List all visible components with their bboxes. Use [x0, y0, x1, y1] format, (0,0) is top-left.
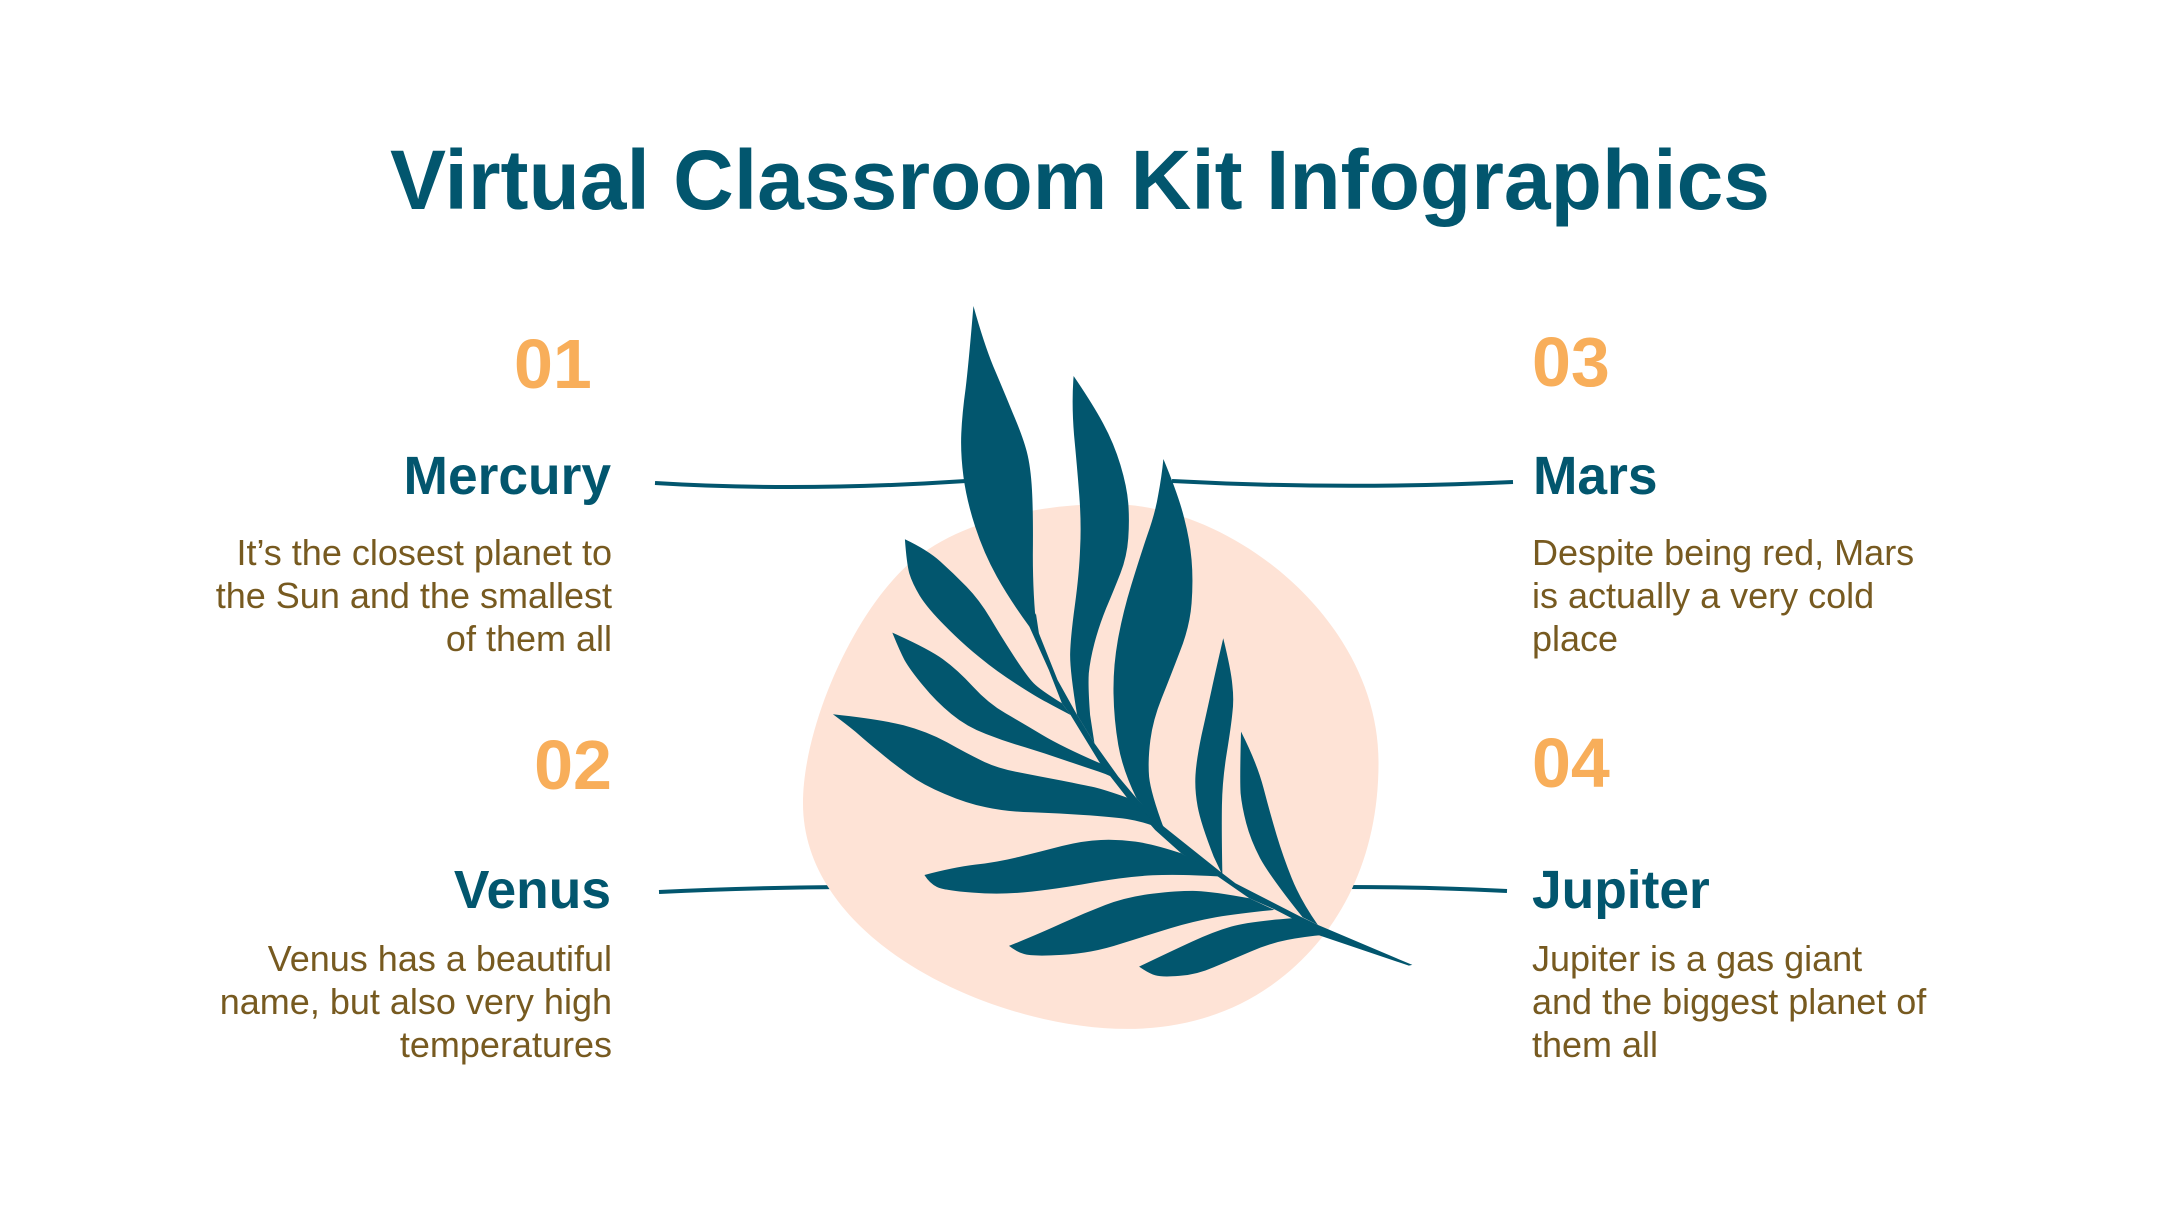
- number 03: 03: [1532, 323, 1610, 401]
- description Jupiter: them all: [1532, 1024, 1658, 1065]
- panel: 03 Mars: [1532, 323, 1914, 659]
- description Mars: place: [1532, 618, 1618, 659]
- central illustration: leaf on peach blob: [803, 306, 1412, 1029]
- leaf: left upper: [905, 539, 1071, 715]
- leaf: bottom second: [1009, 891, 1274, 956]
- main stem: [1029, 613, 1412, 966]
- panel: 04 Jupiter: [1532, 724, 1927, 1065]
- connector line: Mercury: [655, 481, 966, 487]
- connector line: Mars: [1172, 481, 1513, 486]
- description Mercury: It’s the closest planet to: [236, 532, 612, 573]
- panel: 02 Venus: [220, 726, 612, 1065]
- description Venus: Venus has a beautiful: [268, 938, 612, 979]
- leaf: bottom first: [924, 840, 1222, 894]
- leaf branch: [833, 306, 1412, 976]
- heading Jupiter: Jupiter: [1532, 861, 1710, 920]
- description Mars: Despite being red, Mars: [1532, 532, 1914, 573]
- leaf: top middle: [1070, 376, 1129, 743]
- leaf: left middle: [892, 633, 1123, 783]
- description Jupiter: Jupiter is a gas giant: [1532, 938, 1862, 979]
- title: Virtual Classroom Kit Infographics: [390, 133, 1770, 227]
- number 02: 02: [534, 726, 612, 804]
- leaf: top left: [961, 306, 1037, 630]
- leaf: right outer: [1240, 732, 1318, 925]
- description Mercury: of them all: [446, 618, 612, 659]
- description Mercury: the Sun and the smallest: [216, 575, 612, 616]
- heading Mercury: Mercury: [404, 447, 611, 506]
- description Jupiter: and the biggest planet of: [1532, 981, 1927, 1022]
- number 04: 04: [1532, 724, 1610, 802]
- leaf: bottom third: [1139, 918, 1324, 976]
- leaf: left lower: [833, 714, 1164, 830]
- description Mars: is actually a very cold: [1532, 575, 1874, 616]
- heading Mars: Mars: [1533, 447, 1658, 506]
- peach blob: [803, 504, 1379, 1029]
- leaf: right inner: [1195, 638, 1233, 875]
- connector line: Venus: [659, 887, 840, 892]
- leaf: top right: [1113, 459, 1192, 828]
- heading Venus: Venus: [454, 861, 611, 920]
- connector line: Jupiter: [1345, 887, 1507, 891]
- number 01: 01: [514, 325, 592, 403]
- panel: 01 Mercury: [216, 325, 612, 659]
- description Venus: temperatures: [400, 1024, 612, 1065]
- description Venus: name, but also very high: [220, 981, 612, 1022]
